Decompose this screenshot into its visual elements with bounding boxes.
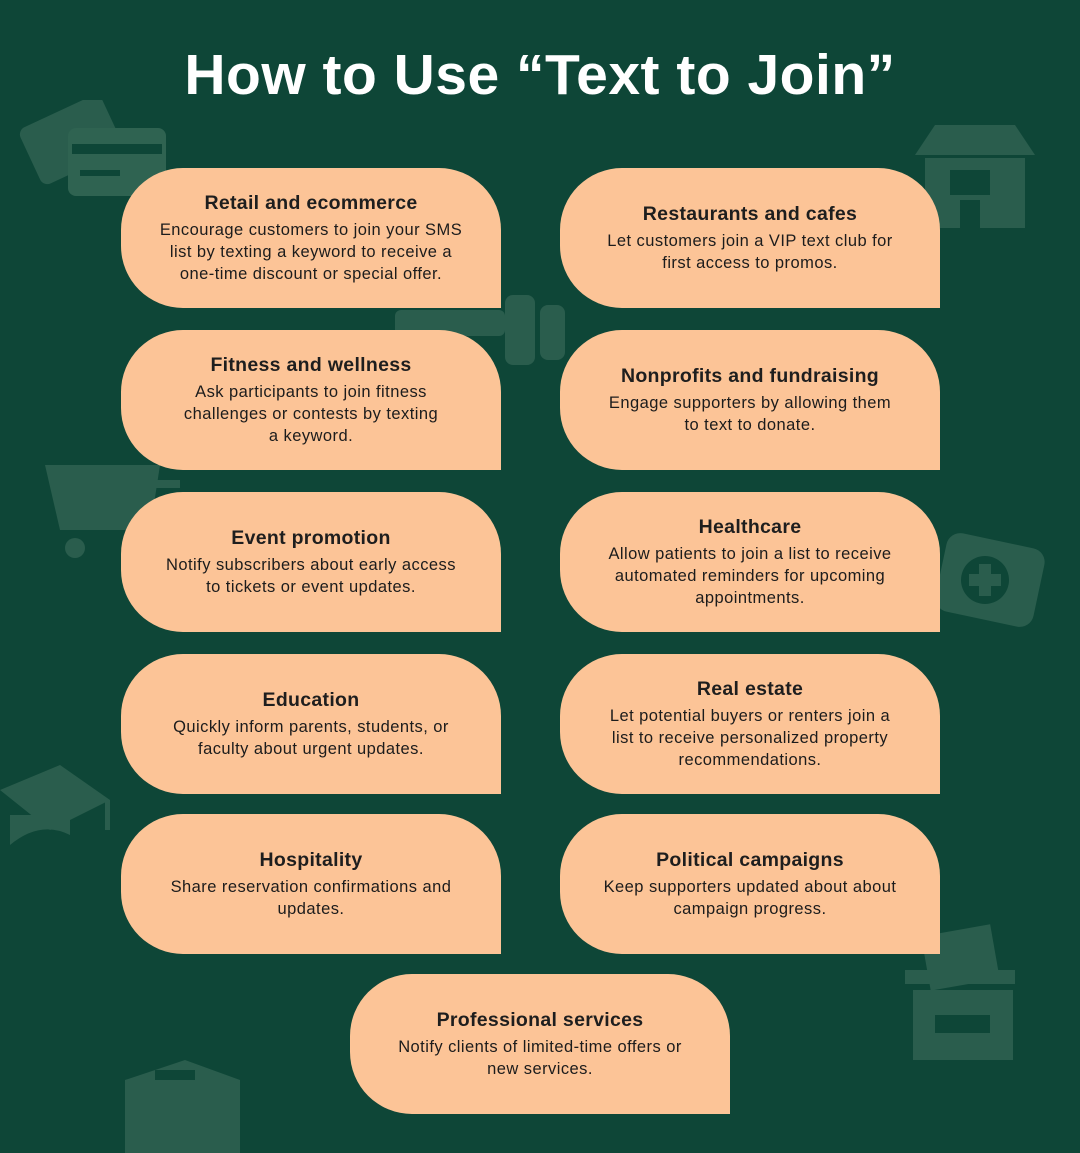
card: retail and ecommerce: list by texting a keyword to receive a: [170, 242, 452, 260]
card: fitness and wellness: challenges or contests by texting: [184, 404, 438, 422]
card: political campaigns: [560, 814, 940, 954]
card: education: Quickly inform parents, students, or: [173, 718, 449, 736]
card: restaurants and cafes: Restaurants and cafes: [643, 202, 857, 224]
card: healthcare: appointments.: [695, 588, 805, 606]
card: healthcare: Allow patients to join a list to receive: [608, 544, 892, 562]
card: hospitality: Hospitality: [260, 848, 362, 870]
card: nonprofits and fundraising: [560, 330, 940, 470]
icon: dumbbell: [395, 295, 565, 365]
card: fitness and wellness: Fitness and wellness: [210, 354, 412, 376]
card: nonprofits and fundraising: Engage supporters by allowing them: [609, 394, 891, 412]
card: event promotion: Notify subscribers about early access: [166, 556, 456, 574]
title: How to Use “Text to Join”: [184, 43, 896, 107]
icon: package box: [125, 1060, 240, 1153]
card: political campaigns: campaign progress.: [673, 900, 826, 918]
icon: credit cards: [20, 100, 166, 196]
card: real estate: Real estate: [697, 678, 803, 700]
card: event promotion: to tickets or event updates.: [206, 578, 416, 596]
card: nonprofits and fundraising: Nonprofits and fundraising: [621, 364, 879, 386]
icon: shopping cart: [45, 465, 180, 558]
card: real estate: list to receive personalized property: [612, 728, 888, 746]
card: professional services: Professional services: [437, 1008, 643, 1030]
card: event promotion: Event promotion: [231, 526, 391, 548]
card: fitness and wellness: a keyword.: [269, 426, 353, 444]
card: real estate: [560, 654, 940, 794]
icon: first aid kit: [940, 533, 1044, 627]
card: fitness and wellness: Ask participants to join fitness: [195, 382, 427, 400]
card: education: faculty about urgent updates.: [198, 740, 424, 758]
card: healthcare: automated reminders for upcoming: [615, 566, 885, 584]
card: retail and ecommerce: [121, 168, 501, 308]
card: education: Education: [263, 688, 359, 710]
card: restaurants and cafes: [560, 168, 940, 308]
card: political campaigns: Keep supporters updated about about: [604, 878, 896, 896]
card: professional services: new services.: [487, 1060, 593, 1078]
icon: ballot box: [905, 924, 1015, 1060]
card: retail and ecommerce: Retail and ecommerce: [204, 192, 418, 214]
card: real estate: Let potential buyers or renters join a: [610, 706, 890, 724]
card: real estate: recommendations.: [679, 750, 821, 768]
card: restaurants and cafes: Let customers join a VIP text club for: [607, 232, 893, 250]
card: fitness and wellness: [121, 330, 501, 470]
card: hospitality: [121, 814, 501, 954]
card: professional services: Notify clients of limited-time offers or: [398, 1038, 682, 1056]
card: retail and ecommerce: Encourage customers to join your SMS: [160, 220, 462, 238]
card: hospitality: Share reservation confirmations and: [171, 878, 451, 896]
card: restaurants and cafes: first access to promos.: [662, 254, 838, 272]
card: education: [121, 654, 501, 794]
icon: storefront: [915, 125, 1035, 228]
card: hospitality: updates.: [278, 900, 344, 918]
icon: graduation cap: [0, 765, 110, 845]
card: professional services: [350, 974, 730, 1114]
card: nonprofits and fundraising: to text to donate.: [684, 416, 816, 434]
card: healthcare: [560, 492, 940, 632]
card: event promotion: [121, 492, 501, 632]
card: retail and ecommerce: one-time discount or special offer.: [180, 264, 442, 282]
card: political campaigns: Political campaigns: [656, 848, 844, 870]
card: healthcare: Healthcare: [699, 516, 801, 538]
